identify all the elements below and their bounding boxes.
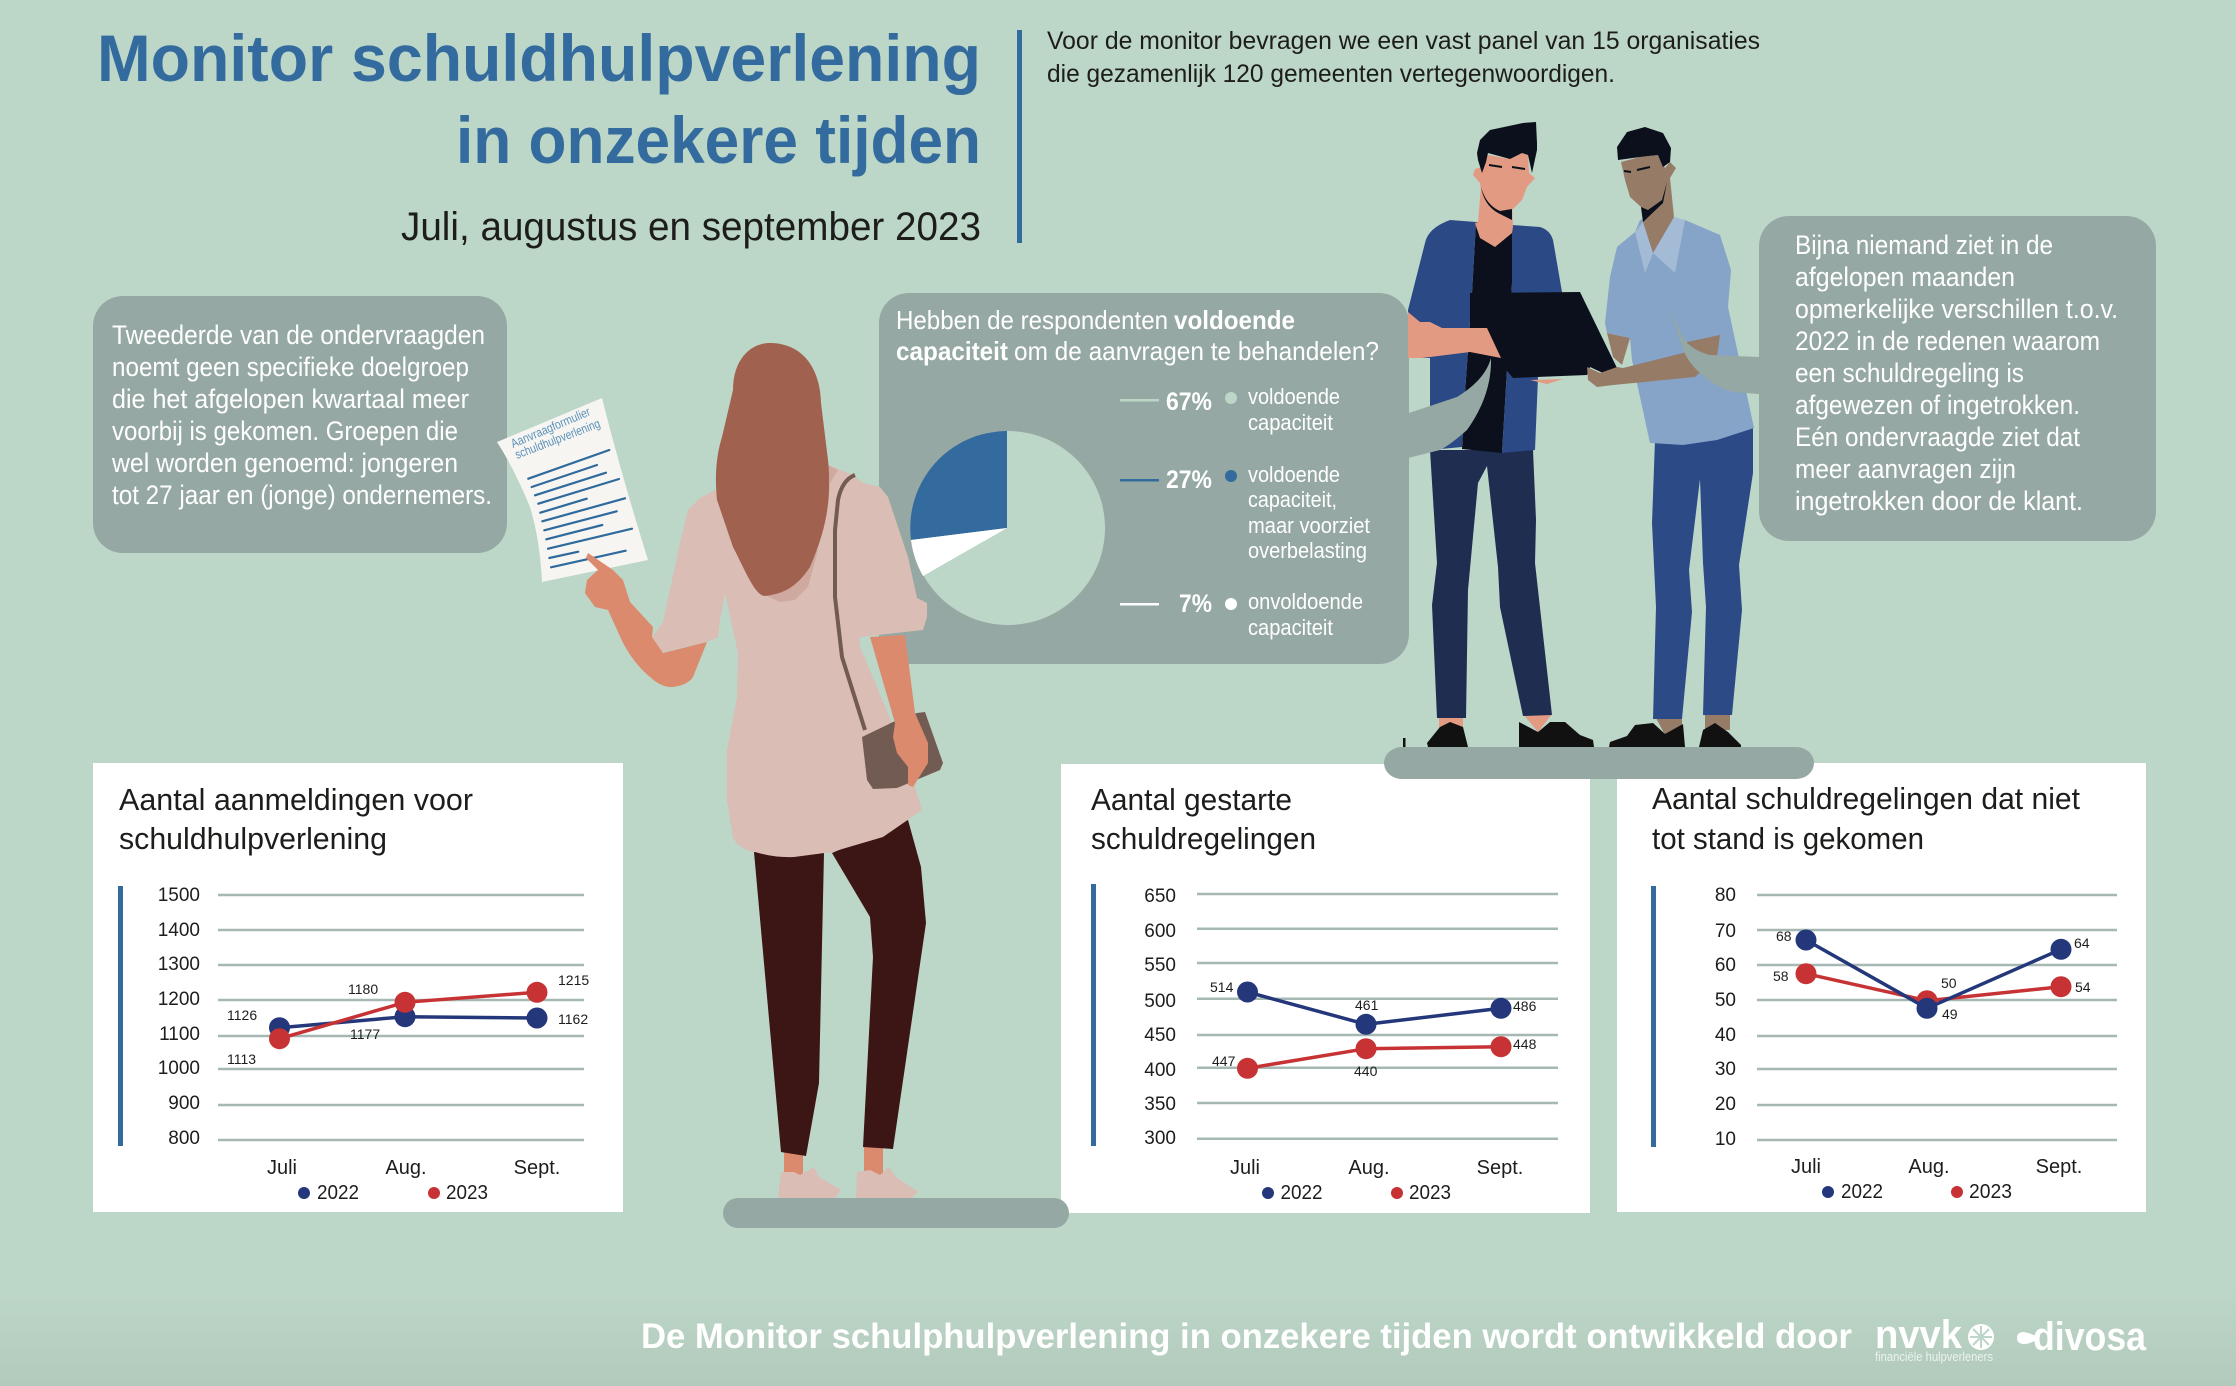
man 2 ankles	[1655, 712, 1730, 735]
chart: niet tot stand gekomen: Sept.	[2036, 1156, 2082, 1178]
ankles	[784, 1145, 883, 1175]
chart: gestarte schuldregelingen: 440	[1354, 1063, 1378, 1079]
man 1 arm	[1408, 312, 1563, 384]
man 1 eyes and mouth	[1489, 165, 1525, 169]
chart: aanmeldingen: Aantal aanmeldingen voor	[119, 782, 473, 817]
small mark by shoe	[1403, 738, 1406, 747]
panel: target groups callout: voorbij is gekomen. Groepen die	[112, 416, 458, 446]
man 2 left forearm	[1607, 333, 1630, 365]
panel: redenen callout: meer aanvragen zijn	[1795, 454, 2016, 484]
man 1 trousers	[1430, 450, 1552, 718]
chart: gestarte schuldregelingen: Sept.	[1477, 1157, 1523, 1179]
hair shadow	[767, 465, 838, 602]
chart: niet tot stand gekomen: 30	[1715, 1059, 1736, 1080]
chart: aanmeldingen: Sept.	[514, 1157, 560, 1179]
chart: aanmeldingen: 1215	[558, 972, 589, 988]
panel: target groups callout	[93, 296, 507, 553]
right arm and hand on bag	[870, 635, 928, 787]
logo: nvvk	[1875, 1313, 1994, 1364]
chart: gestarte schuldregelingen: Aug.	[1348, 1157, 1390, 1179]
legend: 7%: 7%	[1179, 590, 1212, 618]
panel: target groups callout: Tweederde van de ondervraagden	[112, 320, 485, 350]
man 1 shoes	[1427, 722, 1594, 747]
chart: gestarte schuldregelingen: 450	[1144, 1025, 1176, 1046]
panel: redenen callout: ingetrokken door de klant.	[1795, 486, 2083, 516]
title: Monitor schuldhulpverlening	[97, 21, 981, 95]
man 2 shirt	[1605, 215, 1754, 445]
subtitle: period: Juli, augustus en september 2023	[401, 205, 981, 249]
intro text	[1047, 27, 1760, 88]
legend: 67%: 67%	[1166, 388, 1212, 416]
chart: niet tot stand gekomen: 58	[1773, 968, 1789, 984]
question text: Hebben de respondenten	[896, 305, 1168, 335]
paper form	[497, 398, 648, 582]
chart: aanmeldingen: 1162	[558, 1011, 588, 1027]
chart: gestarte schuldregelingen: 2023	[1409, 1182, 1451, 1204]
chart: niet tot stand gekomen: Aantal schuldregelingen dat niet	[1652, 781, 2080, 816]
legend: 27%	[1120, 462, 1370, 563]
chart: gestarte schuldregelingen: 448	[1513, 1036, 1537, 1052]
panel: redenen callout: een schuldregeling is	[1795, 358, 2024, 388]
chart: gestarte schuldregelingen: Juli	[1230, 1157, 1260, 1179]
illustration: two men with laptop	[1403, 122, 1754, 747]
left arm pointing at paper	[585, 553, 707, 687]
pie chart	[910, 431, 1105, 625]
illustration: woman with form	[497, 343, 1069, 1228]
chart: aanmeldingen: 900	[168, 1093, 200, 1114]
question text: capaciteit	[896, 336, 1008, 366]
legend: 27%: 27%	[1166, 466, 1212, 494]
legend: 7%: onvoldoende	[1248, 589, 1363, 614]
chart: aanmeldingen: 1400	[158, 920, 200, 941]
chart: aanmeldingen: 2022	[317, 1182, 359, 1204]
question text: voldoende	[1174, 305, 1295, 335]
title: in onzekere tijden	[456, 103, 981, 177]
chart: aanmeldingen: 1000	[158, 1058, 200, 1079]
man 1 ankles	[1439, 714, 1552, 732]
chart: gestarte schuldregelingen: 400	[1144, 1060, 1176, 1081]
panel: target groups callout: noemt geen specifieke doelgroep	[112, 352, 469, 382]
panel: redenen callout	[1668, 216, 2156, 541]
legend: 67%	[1120, 384, 1340, 435]
chart: aanmeldingen: 1113	[227, 1051, 256, 1067]
man 2 face and neck	[1621, 155, 1676, 253]
panel: capacity question	[879, 293, 1409, 664]
chart: gestarte schuldregelingen	[1061, 764, 1590, 1213]
trousers	[754, 820, 926, 1156]
chart: niet tot stand gekomen	[1617, 763, 2146, 1212]
chart: aanmeldingen: 1177	[350, 1026, 380, 1042]
chart: aanmeldingen: 1126	[227, 1007, 257, 1023]
chart: gestarte schuldregelingen: 500	[1144, 991, 1176, 1012]
man 1 face	[1473, 153, 1535, 212]
chart: niet tot stand gekomen: Juli	[1791, 1156, 1821, 1178]
legend: 27%: capaciteit,	[1248, 487, 1337, 512]
man 1 t-shirt	[1462, 222, 1512, 453]
question text: om de aanvragen te behandelen?	[1014, 336, 1379, 366]
speech tail of capacity panel	[1400, 358, 1491, 460]
question text	[896, 305, 1379, 366]
panel: target groups callout: wel worden genoemd: jongeren	[111, 448, 458, 478]
panel: redenen callout: Bijna niemand ziet in de	[1795, 230, 2053, 260]
legend: 67%: capaciteit	[1248, 410, 1333, 435]
man 2 jeans	[1652, 425, 1753, 719]
chart: aanmeldingen: schuldhulpverlening	[119, 821, 387, 856]
chart: gestarte schuldregelingen: 514	[1210, 979, 1234, 995]
man 2 collar	[1635, 217, 1685, 273]
chart: gestarte schuldregelingen: 447	[1212, 1053, 1236, 1069]
hair	[716, 343, 829, 596]
chart: niet tot stand gekomen: 70	[1715, 921, 1736, 942]
man 1 beard line	[1481, 187, 1512, 220]
chart: gestarte schuldregelingen: schuldregelingen	[1091, 821, 1316, 856]
chart: niet tot stand gekomen: 20	[1715, 1094, 1736, 1115]
panel: redenen callout: 2022 in de redenen waarom	[1795, 326, 2100, 356]
chart: niet tot stand gekomen: 68	[1776, 928, 1792, 944]
man 1 hair	[1477, 122, 1537, 173]
paper form: schuldhulpverlening	[513, 416, 602, 462]
man 2 hair	[1617, 127, 1671, 167]
laptop	[1470, 292, 1617, 378]
platform under woman	[723, 1198, 1069, 1228]
legend: 7%: capaciteit	[1248, 615, 1333, 640]
chart: aanmeldingen: Aug.	[385, 1157, 427, 1179]
chart: niet tot stand gekomen: 64	[2074, 935, 2090, 951]
legend: 7%	[1120, 589, 1363, 640]
chart: gestarte schuldregelingen: 300	[1144, 1128, 1176, 1149]
chart: aanmeldingen: 1200	[158, 989, 200, 1010]
chart: niet tot stand gekomen: 60	[1715, 955, 1736, 976]
chart: aanmeldingen: 1180	[348, 981, 378, 997]
logo: nvvk: nvvk	[1875, 1313, 1963, 1357]
chart: aanmeldingen: 1300	[158, 954, 200, 975]
panel: target groups callout: die het afgelopen kwartaal meer	[112, 384, 469, 414]
chart: gestarte schuldregelingen: 600	[1144, 921, 1176, 942]
chart: gestarte schuldregelingen: 650	[1144, 886, 1176, 907]
chart: niet tot stand gekomen: 2022	[1841, 1181, 1883, 1203]
chart: niet tot stand gekomen: 10	[1715, 1129, 1736, 1150]
logo: divosa: divosa	[2033, 1315, 2147, 1359]
chart: aanmeldingen: 1500	[158, 885, 200, 906]
chart: gestarte schuldregelingen: 350	[1144, 1094, 1176, 1115]
chart: aanmeldingen	[93, 763, 623, 1212]
paper form: Aanvraagformulier	[509, 405, 592, 451]
panel: redenen callout: afgewezen of ingetrokken.	[1795, 390, 2080, 420]
panel: target groups callout: tot 27 jaar en (jonge) ondernemers.	[112, 480, 492, 510]
man 1 neck	[1475, 187, 1513, 247]
footer credit: De Monitor schulphulpverlening in onzekere tijden wordt ontwikkeld door	[641, 1317, 1852, 1356]
panel: redenen callout: Eén ondervraagde ziet dat	[1795, 422, 2080, 452]
intro text: die gezamenlijk 120 gemeenten vertegenwoordigen.	[1047, 60, 1615, 88]
chart: niet tot stand gekomen: tot stand is gekomen	[1652, 821, 1924, 856]
legend: 27%: maar voorziet	[1248, 513, 1370, 538]
chart: gestarte schuldregelingen: Aantal gestarte	[1091, 782, 1292, 817]
shoes	[778, 1167, 918, 1198]
logo: nvvk: financiële hulpverleners	[1875, 1349, 1993, 1364]
man 2 beard	[1641, 182, 1667, 222]
chart: gestarte schuldregelingen: 486	[1513, 998, 1537, 1014]
chart: aanmeldingen: 1100	[159, 1024, 200, 1045]
chart: niet tot stand gekomen: 50	[1941, 975, 1957, 991]
legend: 67%: voldoende	[1248, 384, 1340, 409]
chart: niet tot stand gekomen: 80	[1715, 885, 1736, 906]
chart: niet tot stand gekomen: 49	[1942, 1006, 1958, 1022]
legend: 27%: overbelasting	[1248, 538, 1367, 563]
platform under men	[1384, 747, 1814, 779]
man 1 jacket	[1408, 220, 1562, 453]
chart: gestarte schuldregelingen: 461	[1355, 997, 1379, 1013]
handbag	[862, 712, 943, 789]
vertical divider	[1017, 30, 1022, 243]
chart: niet tot stand gekomen: 40	[1715, 1025, 1736, 1046]
man 2 right arm	[1587, 335, 1720, 387]
dress	[652, 465, 927, 857]
man 2 shoes	[1609, 723, 1741, 747]
chart: gestarte schuldregelingen: 550	[1144, 955, 1176, 976]
panel: redenen callout: opmerkelijke verschillen t.o.v.	[1795, 294, 2118, 324]
title	[97, 21, 981, 177]
chart: aanmeldingen: 2023	[446, 1182, 488, 1204]
man 2 eyes	[1624, 167, 1650, 172]
legend: 27%: voldoende	[1248, 462, 1340, 487]
chart: aanmeldingen: Juli	[267, 1157, 297, 1179]
intro text: Voor de monitor bevragen we een vast panel van 15 organisaties	[1047, 27, 1760, 55]
chart: aanmeldingen: 800	[168, 1128, 200, 1149]
chart: niet tot stand gekomen: 54	[2075, 979, 2091, 995]
chart: niet tot stand gekomen: Aug.	[1908, 1156, 1950, 1178]
bag strap	[835, 475, 865, 730]
chart: niet tot stand gekomen: 50	[1715, 990, 1736, 1011]
chart: niet tot stand gekomen: 2023	[1969, 1181, 2012, 1203]
chart: gestarte schuldregelingen: 2022	[1280, 1182, 1322, 1204]
panel: redenen callout: afgelopen maanden	[1795, 262, 2015, 292]
